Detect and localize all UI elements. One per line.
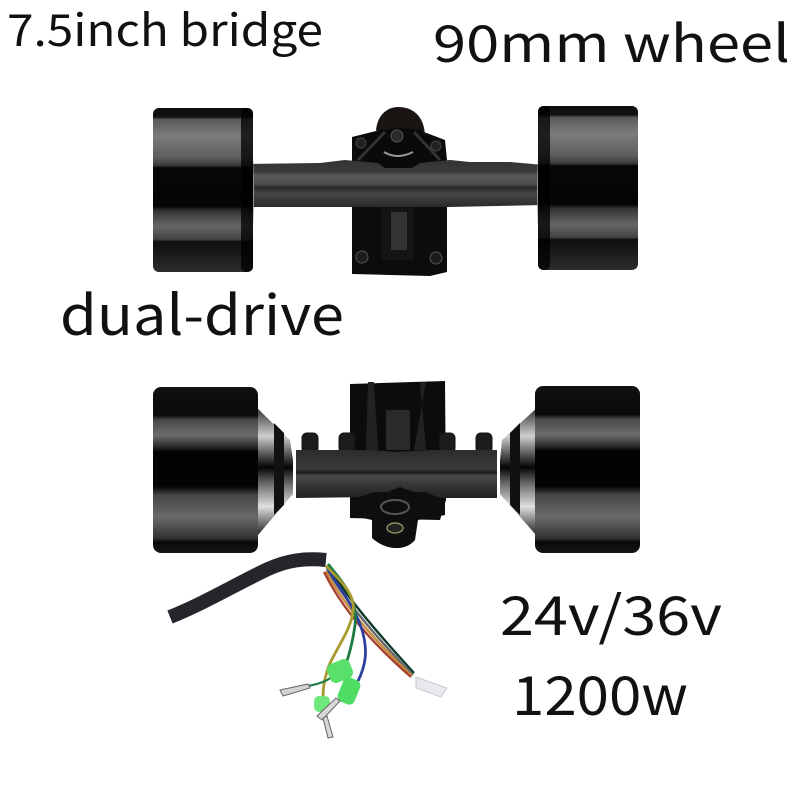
top truck: lower hanger xyxy=(356,205,442,264)
bottom truck: left motor hub xyxy=(254,405,293,535)
terminal: metal spade 2 xyxy=(317,698,340,720)
top truck: kingpin assembly xyxy=(352,128,447,172)
bottom truck: bushing xyxy=(350,492,445,548)
wiring harness illustration xyxy=(170,559,447,738)
wire: green xyxy=(328,564,355,664)
bottom truck: hanger yoke xyxy=(366,382,426,450)
bottom truck: baseplate xyxy=(350,381,446,520)
wire: connector bundle xyxy=(324,568,414,677)
top truck illustration xyxy=(153,106,638,276)
title: 90mm wheel: 90mm wheel xyxy=(433,3,790,77)
label: dual-drive: dual-drive xyxy=(60,271,344,351)
connector: white plug xyxy=(416,677,447,697)
bottom truck illustration xyxy=(153,381,640,553)
terminal: green sleeve 3 xyxy=(314,696,330,712)
label: voltage: 24v/36v xyxy=(500,572,722,651)
top truck: right wheel xyxy=(537,106,638,270)
terminal: green sleeve 1 xyxy=(325,657,355,685)
bottom truck: right wheel xyxy=(535,386,640,553)
top truck: axle xyxy=(248,160,544,207)
cable jacket xyxy=(170,559,326,617)
top truck: baseplate xyxy=(352,129,447,276)
bottom truck: axle xyxy=(296,450,497,498)
bottom truck: left wheel xyxy=(153,387,258,553)
wire: green tail xyxy=(308,677,332,686)
wire: yellow xyxy=(323,566,353,696)
terminal: green sleeve 2 xyxy=(336,676,362,706)
top truck: bushing xyxy=(376,107,425,160)
terminal: metal spade 3 xyxy=(323,716,333,738)
label: power: 1200w xyxy=(512,652,688,731)
terminal: metal spade 1 xyxy=(280,684,310,696)
bottom truck: bolts xyxy=(302,433,492,453)
top truck: left wheel xyxy=(153,108,254,272)
wire: blue xyxy=(327,568,365,681)
bottom truck: right motor hub xyxy=(500,405,540,535)
